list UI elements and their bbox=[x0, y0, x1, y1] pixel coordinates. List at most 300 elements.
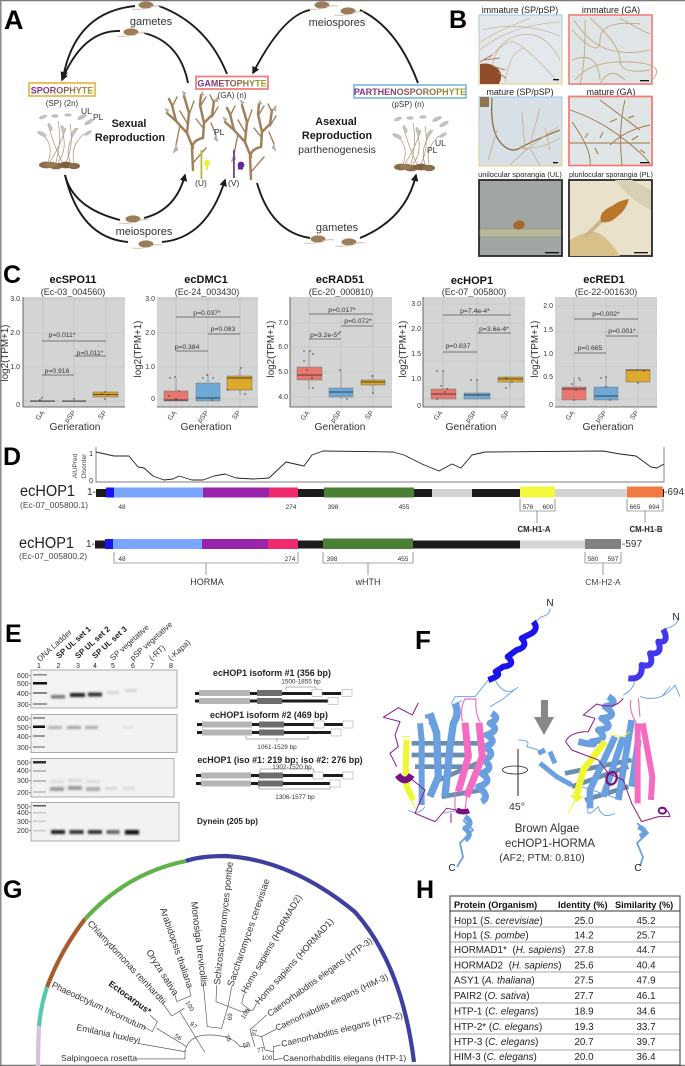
tree taxon labels: Caenorhabditis elegans (HIM-3) bbox=[274, 972, 390, 1033]
chart: ecHOP1: 3.0 bbox=[411, 301, 421, 308]
rotation arrow bbox=[534, 700, 554, 735]
gel 1: 600- bbox=[17, 673, 32, 680]
isoform 2 bar: 580 bbox=[588, 556, 599, 563]
table rows: Hop1 (S. cerevisiae) bbox=[454, 916, 543, 927]
lane labels: 7 bbox=[150, 663, 154, 670]
isoform schematic 2 bbox=[197, 710, 353, 751]
chart: ecRED1: (Ec-22-001630) bbox=[575, 287, 637, 297]
chart: ecSPO11: pSP bbox=[64, 410, 78, 424]
isoform 2 bar: ecHOP1 bbox=[19, 535, 74, 552]
structure labels: 45° bbox=[509, 801, 525, 813]
chart: ecRED1: 0.5 bbox=[543, 374, 553, 381]
table header bbox=[454, 900, 673, 910]
gel 4: 500- bbox=[17, 804, 32, 811]
tree taxon labels: Saccharomyces cerevisiae bbox=[225, 878, 273, 988]
isoform 1 bar: CM-H1-A bbox=[518, 525, 551, 534]
isoform 2 bar: 1- bbox=[86, 539, 95, 550]
isoform schematic 1 bbox=[195, 668, 352, 704]
chart: disorder prediction: 1 bbox=[89, 451, 93, 458]
table header: Protein (Organism) bbox=[454, 900, 537, 910]
photo: plurilocular sporangia bbox=[569, 180, 652, 256]
tree taxon labels: Oryza sativa bbox=[144, 947, 182, 998]
bootstrap values: 69 bbox=[227, 1013, 234, 1021]
chart: ecHOP1: p=7.4e-4* bbox=[460, 308, 490, 315]
sexual reproduction heading: Reproduction bbox=[95, 132, 165, 144]
chart: ecSPO11: 0 bbox=[16, 402, 20, 409]
table rows: 33.7 bbox=[636, 1022, 656, 1033]
isoform 1 bar: ecHOP1 bbox=[20, 483, 75, 500]
chart: ecDMC1: SP bbox=[231, 410, 243, 421]
chart: ecRED1: 1.0 bbox=[543, 351, 553, 358]
panel letter B: B bbox=[449, 6, 467, 34]
sporophyte label: (SP) (2n) bbox=[46, 99, 79, 108]
chart: ecHOP1: log2(TPM+1) bbox=[398, 321, 409, 377]
table rows: HORMAD2 (H. sapiens) bbox=[454, 960, 562, 972]
chart: ecHOP1 bbox=[398, 275, 525, 433]
chart: ecHOP1: 1.0 bbox=[411, 376, 421, 383]
lane labels: 8 bbox=[169, 663, 173, 670]
table rows: HTP-1 (C. elegans) bbox=[454, 1006, 538, 1018]
tree taxon labels: Ectocarpus* bbox=[107, 979, 154, 1016]
structure labels bbox=[448, 598, 680, 874]
chart: ecDMC1: p=0.083 bbox=[211, 326, 236, 333]
table rows: 18.9 bbox=[574, 1006, 594, 1018]
chart: ecRED1: SP bbox=[629, 410, 641, 421]
photo: unilocular sporangia bbox=[479, 180, 562, 256]
panel letter A: A bbox=[4, 5, 24, 35]
panel F: protein structures bbox=[383, 598, 680, 874]
gel 3: 400- bbox=[17, 768, 32, 775]
gel 4: 300- bbox=[17, 819, 32, 826]
chart: ecSPO11: 1.0 bbox=[10, 364, 20, 371]
chart: ecRAD51: (Ec-20_000810) bbox=[309, 287, 373, 297]
bootstrap values: 56 bbox=[173, 1033, 183, 1043]
gel 3: 500- bbox=[17, 760, 32, 767]
chart: ecHOP1: 1.5 bbox=[411, 351, 421, 358]
structure labels: (AF2; PTM: 0.810) bbox=[499, 853, 585, 864]
isoform 2 bar: 597 bbox=[608, 556, 619, 563]
cycle labels: gametes bbox=[316, 222, 359, 234]
tree taxon labels: Homo sapiens (HORMAD1) bbox=[253, 916, 336, 1006]
photo labels bbox=[478, 5, 653, 179]
isoform 2 bar: 48 bbox=[118, 556, 126, 563]
table rows: 25.0 bbox=[574, 916, 594, 927]
gel 2: 400- bbox=[17, 734, 32, 741]
gel 2: 300- bbox=[17, 745, 32, 752]
table rows: 19.3 bbox=[574, 1022, 594, 1033]
gel 1: 300- bbox=[17, 702, 32, 709]
left C-terminal tail bbox=[457, 820, 473, 867]
tree taxon labels: Salpingoeca rosetta bbox=[61, 1053, 137, 1063]
tree taxon labels: Caenorhabditis elegans (HTP-1) bbox=[283, 1053, 406, 1063]
icon: V male sporangia bbox=[233, 150, 244, 178]
table rows: HTP-2* (C. elegans) bbox=[454, 1022, 542, 1033]
chart: ecRAD51: 6.0 bbox=[278, 344, 288, 351]
bootstrap values: 97 bbox=[188, 1021, 198, 1031]
lane labels: 6 bbox=[131, 663, 135, 670]
isoform 2 bar bbox=[19, 535, 642, 587]
isoform 2 bar: 455 bbox=[398, 556, 409, 563]
chart: ecRAD51: log2(TPM+1) bbox=[266, 321, 277, 377]
isoform 1 bar: 576 bbox=[523, 504, 534, 511]
small labels: UL bbox=[435, 138, 446, 148]
chart: ecDMC1: p=0.384 bbox=[175, 344, 200, 351]
sporophyte label: SPOROPHYTE bbox=[31, 85, 93, 95]
small labels: (U) bbox=[195, 178, 207, 188]
isoform 1 bar: 48 bbox=[118, 504, 126, 511]
photo labels: mature (SP/pSP) bbox=[486, 87, 554, 97]
lane labels: SP UL set 1 bbox=[54, 624, 93, 660]
table rows: 39.7 bbox=[636, 1037, 656, 1048]
gel 3: 300- bbox=[17, 778, 32, 785]
chart: ecDMC1: ecDMC1 bbox=[184, 274, 228, 286]
lane labels: (-Kapa) bbox=[166, 638, 192, 662]
parthenosporophyte label bbox=[354, 85, 466, 109]
chart: ecDMC1 bbox=[133, 274, 258, 433]
bootstrap values: 100 bbox=[262, 1055, 273, 1062]
chart: ecDMC1: 2.0 bbox=[145, 330, 155, 337]
chart: ecRAD51: 7.0 bbox=[278, 320, 288, 327]
panel letter E: E bbox=[5, 620, 22, 648]
isoform 2 bar: (Ec-07_005800.2) bbox=[19, 551, 87, 561]
sexual reproduction heading bbox=[95, 118, 165, 144]
tree branches bbox=[137, 984, 283, 1060]
gel 2 bbox=[17, 714, 177, 752]
panel letter D: D bbox=[3, 443, 21, 471]
gel 2: 600- bbox=[17, 716, 32, 723]
tree taxon labels: Arabidopsis thaliana bbox=[158, 906, 196, 990]
chart: ecRAD51: Generation bbox=[315, 422, 366, 433]
isoform schematic 2: ecHOP1 isoform #2 (469 bp) bbox=[210, 710, 328, 720]
chart: ecSPO11: p=0.916 bbox=[45, 368, 70, 375]
table rows: PAIR2 (O. sativa) bbox=[454, 991, 530, 1002]
chart: ecSPO11: Generation bbox=[50, 422, 101, 433]
sexual reproduction heading: Sexual bbox=[112, 118, 146, 130]
table rows: 44.7 bbox=[636, 945, 656, 956]
chart: ecRED1: pSP bbox=[595, 410, 609, 424]
table rows: 40.4 bbox=[636, 960, 656, 972]
icon: gametophyte V bbox=[223, 100, 276, 179]
panel G: phylogeny bbox=[3, 856, 414, 1066]
photo labels: immature (SP/pSP) bbox=[482, 5, 558, 15]
asexual reproduction heading: Reproduction bbox=[302, 130, 372, 142]
table rows: 34.6 bbox=[636, 1006, 656, 1018]
right structure bbox=[518, 618, 680, 837]
photo: immature GA bbox=[569, 15, 657, 84]
isoform 2 bar: -597 bbox=[622, 539, 642, 550]
chart: ecDMC1: 0 bbox=[151, 396, 155, 403]
table rows: 20.0 bbox=[574, 1052, 594, 1063]
photo: mature SP bbox=[479, 97, 562, 166]
small labels bbox=[81, 106, 446, 188]
chart: ecRED1: 1.5 bbox=[543, 327, 553, 334]
panel A: life cycle bbox=[4, 1, 466, 248]
table rows: Hop1 (S. pombe) bbox=[454, 930, 529, 942]
isoform schematic 1: 1500-1855 bp bbox=[281, 678, 321, 686]
isoform 1 bar bbox=[20, 483, 684, 534]
gel 4 bbox=[17, 802, 179, 841]
chart: ecRAD51: GA bbox=[300, 410, 312, 422]
chart: ecRED1: p=0.002* bbox=[592, 311, 620, 318]
chart: ecDMC1: GA bbox=[167, 410, 179, 422]
chart: ecHOP1: pSP bbox=[465, 410, 479, 424]
gametophyte label bbox=[196, 76, 268, 100]
tree taxon labels: Schizosaccharomyces pombe bbox=[212, 861, 235, 985]
chart: ecRAD51 bbox=[266, 274, 392, 433]
small labels: (V) bbox=[228, 178, 240, 188]
photo labels: unilocular sporangia (UL) bbox=[478, 170, 562, 179]
gel 4: 400- bbox=[17, 810, 32, 817]
chart: ecRED1: log2(TPM+1) bbox=[530, 321, 541, 377]
icon: sporophyte bbox=[37, 113, 94, 169]
chart: ecSPO11: p=0.011* bbox=[49, 332, 76, 339]
lane labels: 2 bbox=[57, 663, 61, 670]
parthenosporophyte label: (pSP) (n) bbox=[392, 100, 425, 109]
taxon colour arc bbox=[38, 856, 414, 1066]
table rows: 25.6 bbox=[574, 960, 594, 972]
chart: ecDMC1: 3.0 bbox=[145, 296, 155, 303]
chart: ecSPO11: 3.0 bbox=[10, 296, 20, 303]
chart: ecRAD51: pSP bbox=[330, 410, 344, 424]
table rows: HTP-3 (C. elegans) bbox=[454, 1037, 538, 1048]
chart: ecDMC1: 1.0 bbox=[145, 364, 155, 371]
table rows: HIM-3 (C. elegans) bbox=[454, 1052, 537, 1063]
bootstrap values: 77 bbox=[257, 1046, 265, 1055]
isoform 1 bar: 694 bbox=[649, 504, 660, 511]
chart: ecSPO11: SP bbox=[97, 410, 109, 421]
chart: ecRED1: p=0.665 bbox=[578, 345, 603, 352]
bootstrap values: 100 bbox=[240, 1007, 252, 1021]
lane labels: 5 bbox=[111, 663, 115, 670]
gel 3: 200- bbox=[17, 790, 32, 797]
lane labels: pSP vegetative bbox=[128, 620, 175, 662]
lane labels: 4 bbox=[93, 663, 97, 670]
isoform 1 bar: 274 bbox=[286, 504, 297, 511]
chart: ecSPO11: ecSPO11 bbox=[49, 274, 97, 286]
chart: ecRAD51: p=0.072* bbox=[344, 318, 372, 325]
gel 3 bbox=[17, 758, 174, 797]
lane labels: (-RT) bbox=[147, 643, 167, 662]
chart: ecHOP1: Generation bbox=[446, 422, 497, 433]
chart: ecRAD51: 4.0 bbox=[278, 394, 288, 401]
chart: ecSPO11: (Ec-03_004560) bbox=[41, 287, 105, 297]
asexual reproduction heading: parthenogenesis bbox=[298, 144, 376, 156]
chart: ecHOP1: ecHOP1 bbox=[451, 275, 493, 287]
table rows: 14.2 bbox=[574, 930, 594, 942]
table rows: 45.2 bbox=[636, 916, 656, 927]
isoform 1 bar: (Ec-07_005800.1) bbox=[20, 500, 88, 510]
panel letter H: H bbox=[416, 876, 434, 904]
chart: ecRAD51: ecRAD51 bbox=[316, 274, 364, 286]
small labels: PL bbox=[93, 112, 104, 122]
photo labels: immature (GA) bbox=[582, 5, 640, 15]
icon: U female sporangia bbox=[200, 150, 210, 179]
icon: parthenosporophyte bbox=[392, 115, 449, 171]
gel 1: 400- bbox=[17, 691, 32, 698]
chart: ecSPO11: 2.0 bbox=[10, 330, 20, 337]
chart: ecRAD51: p=0.017* bbox=[328, 307, 356, 314]
chart: ecHOP1: SP bbox=[500, 410, 512, 421]
chart: ecSPO11: p=0.011* bbox=[77, 350, 104, 357]
gel 4: 200- bbox=[17, 828, 32, 835]
chart: ecRED1: 2.0 bbox=[543, 303, 553, 310]
structure labels: Brown Algae bbox=[515, 823, 579, 835]
chart: ecHOP1: 0 bbox=[417, 403, 421, 410]
chart: disorder prediction: 0 bbox=[89, 478, 93, 485]
table rows: 27.7 bbox=[574, 991, 594, 1002]
chart: ecDMC1: p=0.037* bbox=[193, 310, 221, 317]
panel C: box plots bbox=[0, 261, 657, 433]
table rows: 20.7 bbox=[574, 1037, 594, 1048]
lane labels: 1 bbox=[37, 663, 41, 670]
chart: ecRED1: p=0.001* bbox=[608, 328, 636, 335]
sporophyte label bbox=[29, 83, 95, 108]
tree taxon labels: Caenorhabditis elegans (HTP-3) bbox=[265, 936, 374, 1019]
small labels: PL bbox=[214, 127, 225, 137]
chart: ecRED1 bbox=[530, 274, 657, 433]
bootstrap values: 100 bbox=[184, 1000, 195, 1013]
panel H: identity table bbox=[416, 876, 680, 1065]
gel 2: 500- bbox=[17, 725, 32, 732]
isoform 2 bar: CM-H2-A bbox=[585, 577, 621, 587]
small labels: UL bbox=[81, 106, 92, 116]
bootstrap values: 91 bbox=[250, 1028, 259, 1037]
chart: ecRED1: GA bbox=[565, 410, 577, 422]
tree taxon labels: Monosiga brevicollis bbox=[188, 901, 209, 988]
chart: ecHOP1: p=3.6e-4* bbox=[479, 326, 509, 333]
isoform 1 bar: CM-H1-B bbox=[630, 525, 663, 534]
isoform 2 bar: HORMA bbox=[190, 577, 224, 587]
rotation symbol bbox=[502, 749, 528, 796]
chart: ecDMC1: pSP bbox=[197, 410, 211, 424]
structure labels: C bbox=[448, 863, 456, 874]
table rows: ASY1 (A. thaliana) bbox=[454, 976, 535, 986]
table rows: 27.5 bbox=[574, 976, 594, 986]
table header: Identity (%) bbox=[558, 900, 608, 910]
table rows: 25.7 bbox=[636, 930, 656, 942]
chart: ecSPO11: GA bbox=[35, 410, 47, 422]
cycle arrows bbox=[62, 6, 418, 242]
isoform 1 bar: 665 bbox=[630, 504, 641, 511]
gametophyte label: (GA) (n) bbox=[218, 91, 247, 100]
cycle labels bbox=[116, 16, 366, 238]
photo labels: mature (GA) bbox=[587, 87, 635, 97]
panel B: photos bbox=[449, 5, 657, 256]
table rows: 36.4 bbox=[636, 1052, 656, 1063]
right C-terminal tail bbox=[637, 823, 648, 866]
tree taxon labels: Phaeodctylum tricornutum bbox=[50, 980, 148, 1032]
small labels: PL bbox=[427, 145, 438, 155]
lane labels: SP UL set 3 bbox=[90, 624, 129, 660]
isoform schematic 3 bbox=[196, 755, 363, 801]
tree taxon labels: Homo sapiens (HORMAD2) bbox=[239, 893, 304, 995]
lane labels: SP UL set 2 bbox=[73, 624, 112, 660]
chart: ecRAD51: SP bbox=[364, 410, 376, 421]
chart: ecRED1: Generation bbox=[583, 422, 634, 433]
isoform 1 bar: 600 bbox=[543, 504, 554, 511]
isoform 2 bar: 398 bbox=[327, 556, 338, 563]
lane labels: SP vegetative bbox=[108, 622, 151, 662]
isoform 1 bar: -694 bbox=[664, 487, 684, 498]
tree taxon labels bbox=[50, 861, 406, 1063]
bootstrap values: 58 bbox=[242, 1041, 251, 1050]
lane labels: DNA Ladder bbox=[35, 627, 74, 663]
panel letter F: F bbox=[415, 625, 431, 655]
chart: ecSPO11 bbox=[0, 274, 125, 433]
table rows: HORMAD1* (H. sapiens) bbox=[454, 945, 565, 956]
chart: disorder prediction: Disorder bbox=[81, 453, 88, 478]
gametophyte label: GAMETOPHYTE bbox=[197, 78, 267, 88]
zoospore icons bbox=[117, 1, 365, 248]
lane labels: 3 bbox=[76, 663, 80, 670]
cycle labels: gametes bbox=[130, 16, 173, 28]
table rows: 47.9 bbox=[636, 976, 656, 986]
bootstrap values: 76 bbox=[222, 1033, 232, 1043]
panel D: domain maps bbox=[3, 443, 684, 587]
table rows bbox=[454, 916, 656, 1063]
table frame bbox=[450, 896, 680, 1065]
isoform schematic 2: 1061-1529 bp bbox=[257, 744, 297, 751]
lane labels bbox=[35, 620, 192, 670]
photo: mature GA bbox=[569, 96, 652, 166]
structure labels: N bbox=[672, 612, 680, 623]
isoform 1 bar: 455 bbox=[399, 504, 410, 511]
structure labels: C bbox=[634, 863, 642, 874]
panel E: gels bbox=[5, 620, 363, 841]
gel 1 bbox=[17, 670, 177, 709]
parthenosporophyte label: PARTHENOSPOROPHYTE bbox=[354, 87, 466, 97]
tree taxon labels: Chlamydomonas reinhardtii bbox=[86, 919, 168, 1006]
chart: disorder prediction bbox=[72, 447, 664, 485]
chart: ecRED1: ecRED1 bbox=[583, 274, 625, 286]
chart: ecHOP1: GA bbox=[433, 410, 445, 422]
isoform schematic 3: ecHOP1 (iso #1: 219 bp; iso #2: 276 bp) bbox=[197, 755, 363, 765]
chart: ecHOP1: p=0.637 bbox=[446, 343, 471, 350]
asexual reproduction heading: Asexual bbox=[315, 116, 357, 128]
chart: ecDMC1: Generation bbox=[181, 422, 232, 433]
cycle labels: meiospores bbox=[309, 17, 366, 29]
chart: ecSPO11: log2(TPM+1) bbox=[0, 325, 11, 381]
structure labels: N bbox=[546, 598, 554, 609]
photo labels: plurilocular sporangia (PL) bbox=[569, 170, 653, 179]
isoform schematic 3: 1306-1577 bp bbox=[275, 794, 315, 801]
isoform 1 bar: 1- bbox=[87, 487, 96, 498]
table rows: 27.8 bbox=[574, 945, 594, 956]
chart: ecDMC1: (Ec-24_003430) bbox=[175, 287, 239, 297]
icon: gametophyte U bbox=[165, 91, 218, 170]
isoform schematic 3: 1302-1520 bp bbox=[272, 764, 312, 771]
chart: ecRAD51: p=3.2e-5* bbox=[310, 332, 340, 339]
structure labels: ecHOP1-HORMA bbox=[505, 838, 595, 850]
isoform 1 bar: 398 bbox=[328, 504, 339, 511]
photo: immature SP bbox=[479, 15, 562, 84]
isoform 2 bar: 274 bbox=[285, 556, 296, 563]
chart: disorder prediction: AIUPred bbox=[72, 453, 79, 478]
chart: ecHOP1: (Ec-07_005800) bbox=[442, 287, 506, 297]
asexual reproduction heading bbox=[298, 116, 376, 156]
tree taxon labels: Emilania huxleyi bbox=[76, 1022, 141, 1045]
left structure bbox=[383, 608, 550, 840]
panel letter G: G bbox=[3, 876, 22, 904]
chart: ecRED1: 0 bbox=[549, 402, 553, 409]
chart: ecRAD51: 5.0 bbox=[278, 369, 288, 376]
dynein label: Dynein (205 bp) bbox=[197, 817, 258, 826]
isoform 2 bar: wHTH bbox=[354, 577, 380, 587]
gel 1: 500- bbox=[17, 681, 32, 688]
isoform schematic 1: ecHOP1 isoform #1 (356 bp) bbox=[213, 668, 331, 678]
tree taxon labels: Caenorhabditis elegans (HTP-2) bbox=[280, 1010, 404, 1049]
table header: Similarity (%) bbox=[615, 900, 673, 910]
